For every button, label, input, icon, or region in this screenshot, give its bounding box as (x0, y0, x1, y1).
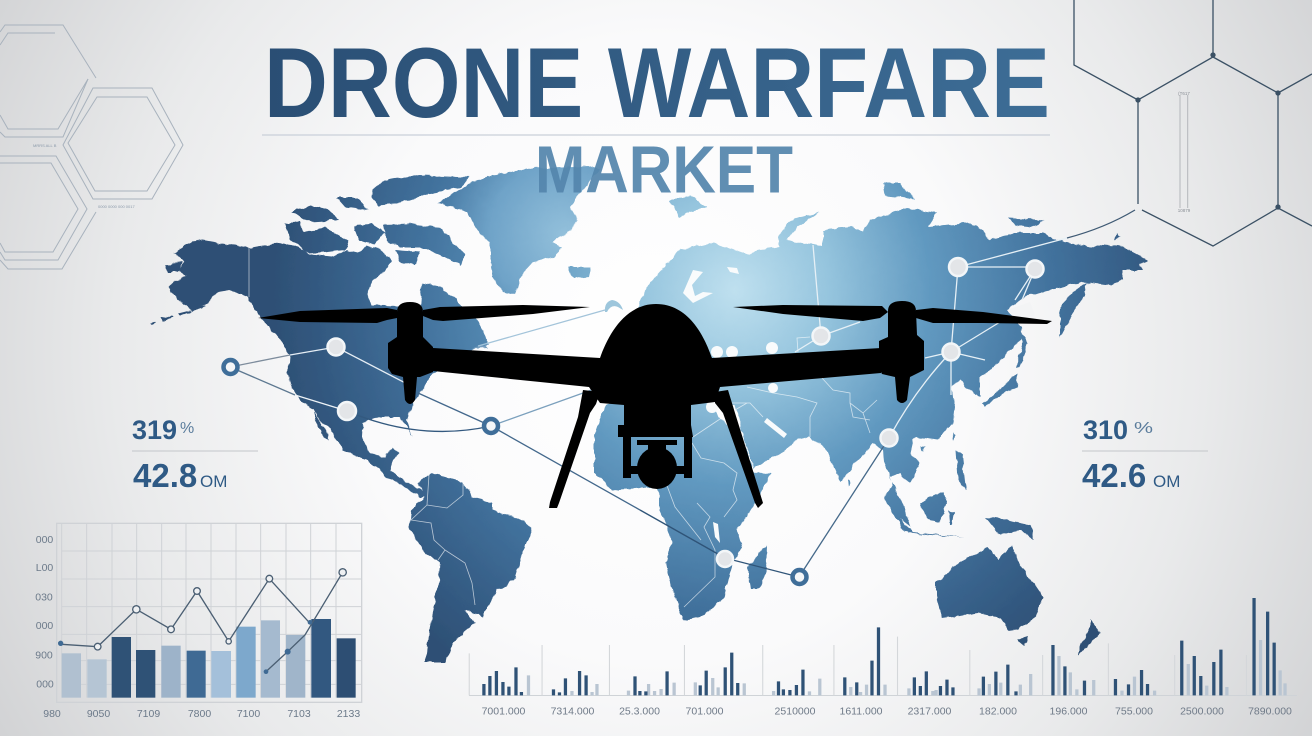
drone: camera (637, 447, 677, 489)
bottom chart labels: 701.000 (686, 706, 724, 718)
left percent sign: % (180, 420, 194, 437)
node rings: dark blue (224, 360, 806, 584)
chart y axis labels: 030 (35, 592, 53, 604)
map: Eurasia (635, 208, 1148, 483)
right percentage value: 310 (1083, 415, 1128, 445)
chart x axis labels: 7800 (188, 708, 211, 720)
drone: body and arms (423, 304, 881, 437)
combo chart: bars and line (35, 523, 362, 720)
bottom bar chart row (469, 598, 1297, 718)
chart x axis labels (43, 708, 360, 720)
statistic: left (132, 415, 258, 494)
bottom chart labels: 7890.000 (1248, 706, 1292, 718)
chart x axis labels: 9050 (87, 708, 110, 720)
drone: left motor (388, 302, 433, 404)
map: Iceland (568, 267, 590, 279)
hexagon decoration: top right: (T617 (1178, 91, 1190, 96)
map: Kamchatka and Sakhalin (1016, 282, 1087, 368)
statistic: right (1082, 415, 1208, 494)
chart x axis labels: 2133 (337, 708, 360, 720)
world map (150, 166, 1148, 662)
left market value: 42.8 (133, 457, 197, 494)
drone: left rotor (258, 308, 397, 323)
drone: right rotor (733, 305, 888, 321)
hidden node behind rotor (605, 300, 623, 312)
chart bars (62, 619, 356, 698)
bottom chart labels: 7001.000 (482, 706, 526, 718)
left stat divider (132, 450, 258, 452)
network connection lines (230, 210, 1135, 577)
map: Newfoundland (448, 327, 488, 349)
bottom chart labels: 2317.000 (908, 706, 952, 718)
right stat divider (1082, 450, 1208, 452)
map: Baja California (313, 411, 330, 440)
hexagon decoration: top left: MRRS ALL B (33, 143, 57, 148)
right unit: OM (1153, 472, 1180, 491)
map: Arctic Russia islands (883, 183, 1122, 240)
left percentage value: 319 (132, 415, 177, 445)
chart y axis labels: L00 (36, 562, 53, 574)
chart x axis labels: 7103 (287, 708, 311, 720)
right market value: 42.6 (1082, 457, 1146, 494)
chart trend line (58, 569, 346, 674)
map: Japan (983, 373, 1018, 407)
map: seas and lakes (683, 267, 1035, 543)
title divider (262, 134, 1050, 136)
map: Africa (594, 395, 771, 620)
map: South America (409, 473, 532, 662)
chart y axis labels: 000 (36, 534, 53, 546)
bottom chart labels: 2500.000 (1180, 706, 1224, 718)
bottom chart labels (482, 706, 1292, 718)
map: New Zealand (1079, 618, 1100, 655)
chart y axis labels: 000 (36, 678, 54, 690)
bottom chart labels: 7314.000 (551, 706, 595, 718)
bottom chart labels: 755.000 (1115, 706, 1153, 718)
map: Southeast Asia and Indonesia (848, 432, 1035, 540)
subtitle: MARKET (535, 132, 793, 208)
network nodes (224, 258, 1044, 584)
bottom chart labels: 1611.000 (839, 706, 883, 718)
map: Australia (936, 545, 1043, 631)
bottom chart labels: 182.000 (979, 706, 1017, 718)
bottom chart labels: 25.3.000 (619, 706, 660, 718)
hexagon decoration: top left (0, 25, 183, 269)
map: country borders (249, 248, 877, 607)
bottom chart baseline (469, 694, 1297, 696)
drone: left leg (549, 390, 600, 508)
left unit: OM (200, 472, 227, 491)
drone: right leg (715, 390, 763, 508)
hexagon decoration: top left: 0000 0000 000 0017 (98, 204, 135, 209)
chart x axis labels: 7100 (237, 708, 260, 720)
bottom chart light bars (527, 640, 1287, 695)
map: Tasmania (1018, 637, 1028, 646)
map: Bering and Aleutian islands (150, 262, 206, 324)
chart y axis labels: 900 (35, 650, 53, 662)
title: DRONE WARFARE (264, 27, 1050, 138)
hexagon decoration: top right (1074, 0, 1312, 246)
node rings: white (328, 258, 1044, 567)
map: North and Central America (168, 240, 490, 497)
bottom chart labels: 2510000 (775, 706, 816, 718)
chart y axis labels: 000 (36, 620, 53, 632)
drone: camera gimbal (623, 437, 692, 478)
chart frame and grid (57, 523, 362, 702)
map: Madagascar (748, 545, 767, 588)
chart y axis labels (35, 534, 54, 690)
bottom chart dark bars (482, 598, 1276, 695)
drone: right motor (879, 301, 924, 403)
bottom chart labels: 196.000 (1050, 706, 1088, 718)
map: Svalbard (670, 195, 707, 217)
chart x axis labels: 7109 (137, 708, 160, 720)
map: Canadian Arctic islands (285, 175, 470, 265)
map: Greenland (438, 166, 600, 295)
right percent sign: % (1134, 420, 1153, 437)
hexagon decoration: top right: 10879 (1178, 208, 1191, 213)
chart x axis labels: 980 (43, 708, 61, 720)
drone silhouette (258, 301, 1052, 508)
bottom chart dividers (469, 637, 1246, 695)
